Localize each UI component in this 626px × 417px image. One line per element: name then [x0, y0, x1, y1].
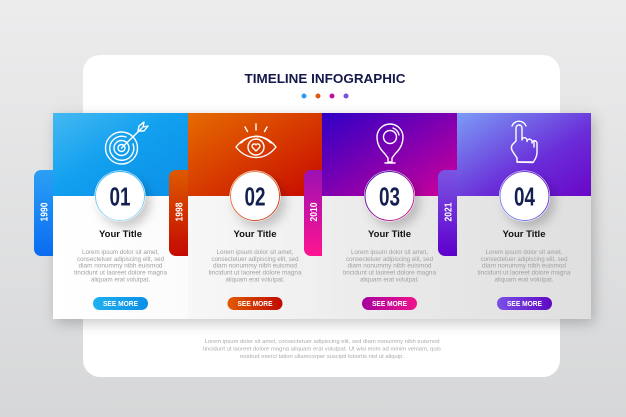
heading 3: Your Title — [368, 229, 411, 240]
year tab 1998: 1998 — [174, 202, 186, 222]
year tab 2010: 2010 — [308, 202, 320, 222]
text block 1: aliquam erat volutpat. — [91, 277, 150, 283]
body background 3 — [322, 196, 457, 319]
number badge 02: 02 — [244, 182, 266, 212]
text block 3: Lorem ipsum dolor sit amet, — [351, 250, 428, 256]
footer text block — [203, 339, 441, 360]
text block 1: Lorem ipsum dolor sit amet, — [82, 250, 159, 256]
heading 4: Your Title — [502, 229, 546, 240]
year tab 2021: 2021 — [442, 202, 454, 222]
button 3: SEE MORE — [372, 301, 407, 308]
year tab 2010 — [304, 170, 322, 256]
icon: map pin — [377, 124, 403, 163]
header 3 — [322, 113, 457, 196]
text block 4: diam nonummy nibh euismod — [482, 264, 566, 270]
text block 4: Lorem ipsum dolor sit amet, — [486, 250, 563, 256]
panel: step 3 — [304, 113, 457, 319]
year tab 1998 — [169, 170, 188, 256]
footer text block: nostrud exerci tation ullamcorper suscipit lobortis nisl ut aliquip. — [240, 354, 404, 360]
panel: step 1 — [34, 113, 188, 319]
number badge 03 — [364, 170, 415, 222]
text block 4 — [478, 250, 571, 283]
number badge 04 — [499, 170, 550, 222]
text block 2: Lorem ipsum dolor sit amet, — [216, 250, 294, 256]
text block 2 — [208, 250, 302, 283]
text block 4: tincidunt ut laoreet dolore magna — [478, 270, 571, 276]
heading 2: Your Title — [234, 229, 276, 240]
button 2: SEE MORE — [238, 301, 273, 308]
text block 1: tincidunt ut laoreet dolore magna — [74, 270, 168, 276]
text block 4: consectetuer adipiscing elit, sed — [480, 257, 568, 263]
colour dots — [302, 94, 348, 98]
year tab 1990: 1990 — [38, 202, 50, 222]
text block 2: aliquam erat volutpat. — [226, 277, 285, 283]
text block 1: consectetuer adipiscing elit, sed — [77, 257, 164, 263]
white main panel — [83, 55, 560, 377]
panel: step 2 — [169, 113, 322, 319]
button 2 — [228, 297, 282, 310]
text block 3: tincidunt ut laoreet dolore magna — [343, 270, 437, 276]
text block 4: aliquam erat volutpat. — [494, 277, 554, 283]
year tab 1990 — [34, 170, 53, 256]
text block 2: tincidunt ut laoreet dolore magna — [208, 270, 302, 276]
number badge 02 — [230, 170, 280, 222]
body background 2 — [188, 196, 322, 319]
icon: pointing hand — [512, 121, 537, 162]
text block 2: consectetuer adipiscing elit, sed — [212, 257, 298, 263]
title: TIMELINE INFOGRAPHIC — [244, 71, 406, 86]
footer text block: tincidunt ut laoreet dolore magna aliquam erat volutpat. Ut wisi enim ad minim veniam, quis — [203, 346, 441, 352]
body background 4 — [457, 196, 591, 319]
header 1 — [53, 113, 188, 196]
header 4 — [457, 113, 591, 196]
number badge 03: 03 — [379, 182, 400, 212]
body background 1 — [53, 196, 188, 319]
icon: target with arrow — [106, 122, 148, 164]
footer text block: Lorem ipsum dolor sit amet, consectetuer adipiscing elit, sed diam nonummy nibh euismod — [204, 339, 440, 345]
year tab 2021 — [438, 170, 457, 256]
text block 3: aliquam erat volutpat. — [360, 277, 419, 283]
icon: eye with heart — [236, 124, 276, 158]
panel: step 4 — [438, 113, 591, 319]
header 2 — [188, 113, 322, 196]
text block 1 — [74, 250, 168, 283]
button 4 — [497, 297, 552, 310]
text block 2: diam nonummy nibh euismod — [213, 264, 297, 270]
text block 3 — [343, 250, 437, 283]
button 4: SEE MORE — [507, 301, 542, 308]
timeline card block shadow — [53, 113, 591, 319]
heading 1: Your Title — [99, 229, 142, 240]
button 3 — [362, 297, 417, 310]
number badge 01 — [94, 170, 146, 222]
number badge 04: 04 — [514, 182, 535, 212]
number badge 01: 01 — [110, 182, 130, 212]
text block 1: diam nonummy nibh euismod — [78, 264, 162, 270]
text block 3: consectetuer adipiscing elit, sed — [346, 257, 433, 263]
button 1: SEE MORE — [103, 301, 138, 308]
button 1 — [93, 297, 148, 310]
text block 3: diam nonummy nibh euismod — [348, 264, 432, 270]
